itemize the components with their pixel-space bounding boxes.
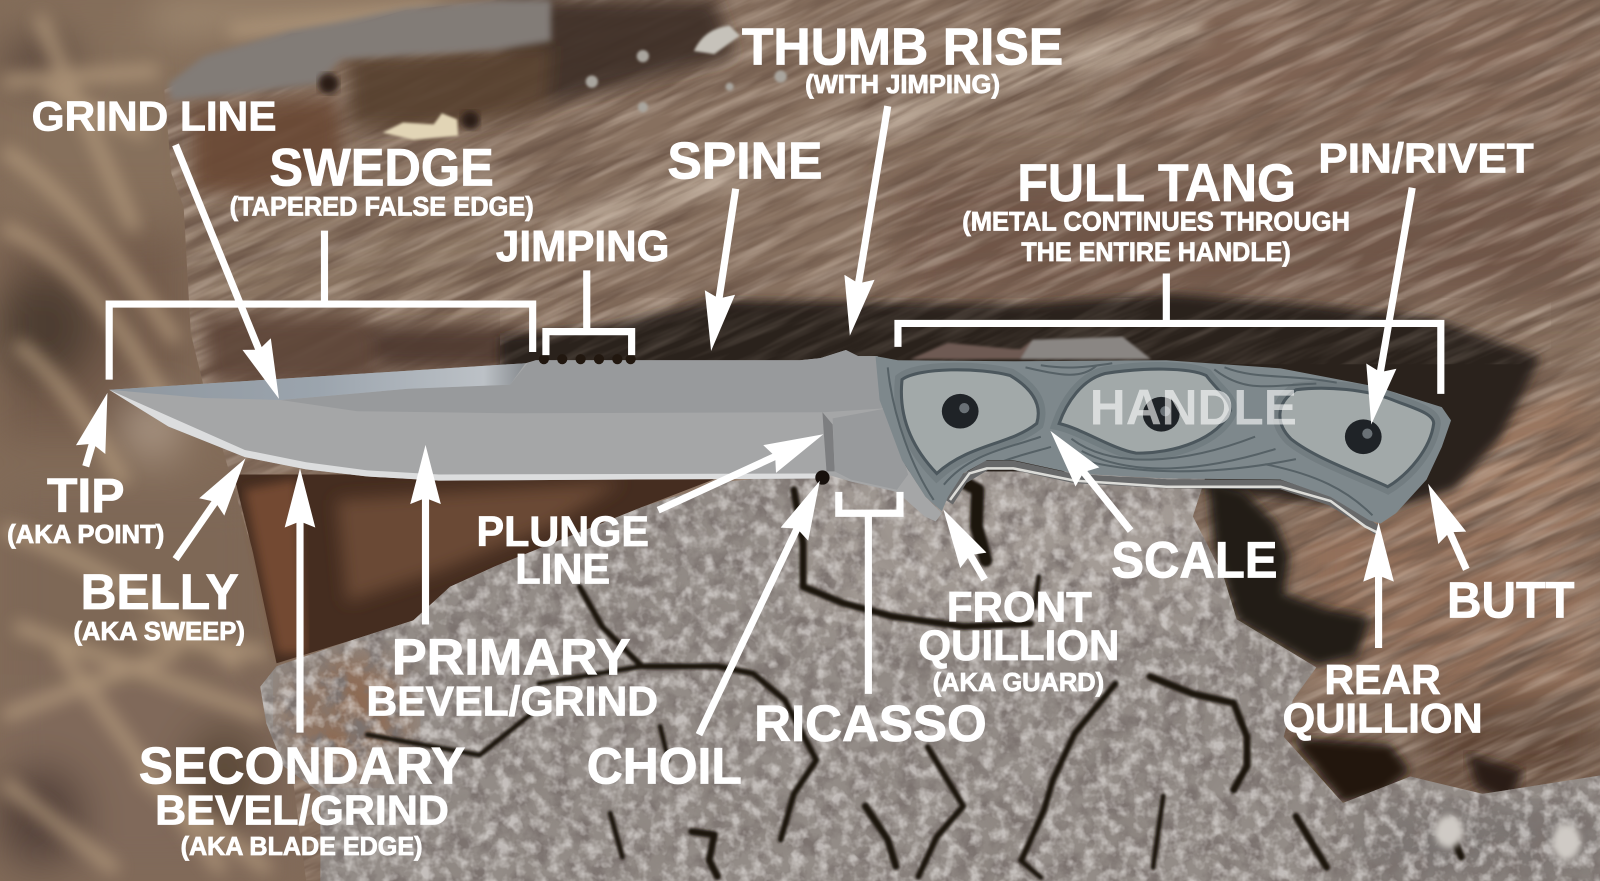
label: secondary bevel/grind: SECONDARY <box>139 738 465 796</box>
handle scale <box>876 356 1451 524</box>
label: primary bevel/grind: PRIMARY <box>392 628 631 685</box>
dark top-left wood blocks <box>194 0 735 383</box>
label: swedge: (TAPERED FALSE EDGE) <box>230 191 534 221</box>
label: secondary bevel/grind <box>139 469 465 861</box>
bevel edge highlight <box>109 390 816 481</box>
pin / rivet 2 <box>1143 397 1180 432</box>
label: primary bevel/grind: BEVEL/GRIND <box>366 677 658 724</box>
label: pin/rivet: PIN/RIVET <box>1318 134 1534 181</box>
label: jimping: JIMPING <box>496 222 669 271</box>
rock cracks <box>367 480 1461 878</box>
pin / rivet 1 <box>942 394 979 429</box>
label: thumb rise: THUMB RISE <box>742 18 1063 76</box>
label: tip <box>7 394 164 549</box>
label: full tang: THE ENTIRE HANDLE) <box>1021 237 1291 267</box>
label: jimping <box>496 222 669 355</box>
label: spine <box>667 133 822 350</box>
label: ricasso: RICASSO <box>754 695 987 752</box>
label: full tang: (METAL CONTINUES THROUGH <box>962 207 1350 237</box>
label: pin/rivet <box>1318 134 1534 423</box>
label: butt <box>1429 485 1574 628</box>
label: swedge <box>109 139 534 380</box>
handle label: HANDLE <box>1090 379 1297 435</box>
label: secondary bevel/grind: BEVEL/GRIND <box>155 786 449 833</box>
label: full tang <box>898 154 1441 394</box>
label: thumb rise: (WITH JIMPING) <box>805 71 1000 99</box>
label: scale: SCALE <box>1111 532 1278 589</box>
knife <box>109 347 1469 541</box>
dark wood under the blade <box>234 474 727 663</box>
label: scale <box>1051 432 1278 589</box>
plunge line <box>822 412 835 471</box>
blade <box>109 350 942 521</box>
knife shadow on wood <box>500 294 1551 806</box>
pin / rivet 3 <box>1345 419 1382 454</box>
label: rear quillion: QUILLION <box>1283 695 1483 742</box>
rock behind handle <box>910 337 1151 359</box>
bright diagonal band on wood <box>551 26 1201 235</box>
upper flat <box>281 350 888 413</box>
label: spine: SPINE <box>667 133 822 191</box>
label: tip: (AKA POINT) <box>7 521 164 549</box>
label: choil <box>587 482 819 795</box>
label: thumb rise <box>742 18 1063 335</box>
label: swedge: SWEDGE <box>269 139 494 198</box>
label: ricasso <box>754 492 987 752</box>
label: plunge line: LINE <box>515 546 610 594</box>
label: tip: TIP <box>47 470 124 523</box>
label: grind line: GRIND LINE <box>32 93 277 140</box>
label: grind line <box>32 93 279 398</box>
swedge <box>109 363 526 400</box>
label: choil: CHOIL <box>587 738 742 795</box>
label: rear quillion <box>1283 523 1483 742</box>
label: belly: (AKA SWEEP) <box>73 618 245 646</box>
label: butt: BUTT <box>1447 571 1574 628</box>
label: front quillion: (AKA GUARD) <box>933 669 1104 697</box>
handle liner <box>949 465 1378 531</box>
label: primary bevel/grind <box>366 446 658 724</box>
label: rear quillion: REAR <box>1324 656 1441 703</box>
blurred pale stones, bottom right <box>1435 815 1581 860</box>
label: front quillion: FRONT <box>947 583 1092 631</box>
blurred dry straw, left side <box>0 0 459 878</box>
label: belly <box>73 459 245 646</box>
label: front quillion: QUILLION <box>918 622 1119 670</box>
label: plunge line <box>477 435 822 594</box>
jimping notches <box>539 354 636 364</box>
label: belly: BELLY <box>81 564 239 620</box>
label: front quillion <box>918 510 1119 697</box>
label: full tang: FULL TANG <box>1017 154 1296 213</box>
label: secondary bevel/grind: (AKA BLADE EDGE) <box>181 833 422 861</box>
rough bark edge, top left <box>168 0 787 140</box>
cracked rock <box>260 471 1600 881</box>
label: plunge line: PLUNGE <box>477 508 649 556</box>
